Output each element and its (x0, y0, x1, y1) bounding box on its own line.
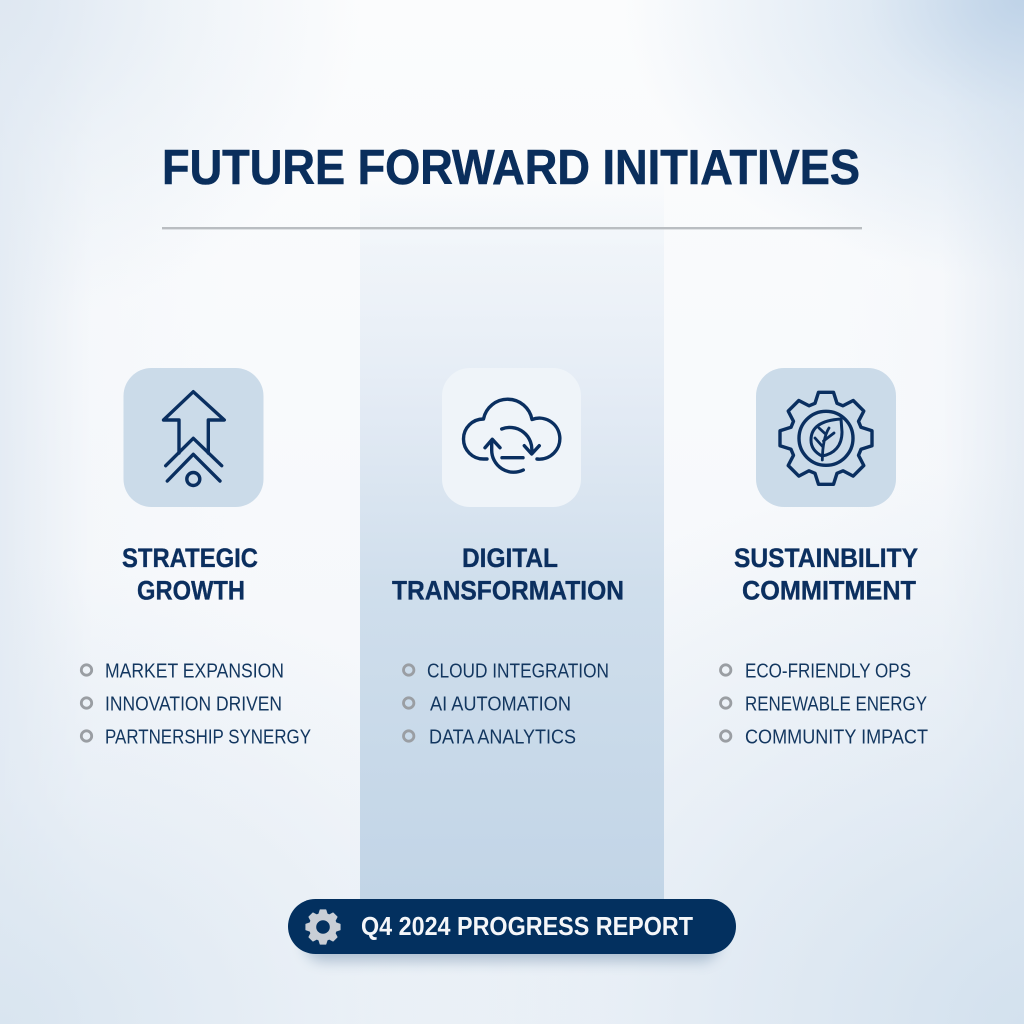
heading: strategic growth: GROWTH (137, 576, 245, 606)
panel: sustainability commitment (720, 368, 928, 748)
heading: digital transformation (392, 543, 624, 606)
panel: center column highlight (360, 180, 664, 925)
list: sustainability items: ECO-FRIENDLY OPS (745, 660, 911, 682)
heading: sustainability commitment (734, 543, 918, 606)
list: sustainability items: RENEWABLE ENERGY (745, 694, 927, 716)
list: strategic growth items: MARKET EXPANSION (105, 660, 284, 682)
list: strategic growth items (81, 660, 311, 748)
title: FUTURE FORWARD INITIATIVES (162, 141, 860, 195)
panel: strategic growth (81, 368, 311, 748)
heading: strategic growth: STRATEGIC (122, 543, 258, 573)
list: strategic growth items: PARTNERSHIP SYNERGY (105, 726, 311, 748)
list: sustainability items (720, 660, 928, 748)
heading: digital transformation: DIGITAL (462, 543, 558, 573)
list: digital transformation items: CLOUD INTEGRATION (427, 660, 609, 682)
list: sustainability items: COMMUNITY IMPACT (745, 726, 928, 748)
icon: arrow and chevrons (124, 368, 264, 507)
panel: digital transformation (392, 368, 624, 748)
heading: sustainability commitment: SUSTAINBILITY (734, 543, 918, 573)
list: strategic growth items: INNOVATION DRIVEN (105, 694, 282, 716)
badge label: Q4 2024 PROGRESS REPORT (361, 911, 693, 941)
icon: gear (306, 910, 340, 944)
heading: digital transformation: TRANSFORMATION (392, 576, 624, 606)
list: digital transformation items (404, 660, 609, 748)
heading: strategic growth (122, 543, 258, 606)
list: digital transformation items: AI AUTOMATION (430, 694, 571, 716)
heading: sustainability commitment: COMMITMENT (742, 576, 916, 606)
icon: gear with leaf (756, 368, 896, 507)
footer badge (288, 899, 736, 961)
icon: cloud sync (442, 368, 581, 507)
list: digital transformation items: DATA ANALYTICS (429, 726, 576, 748)
